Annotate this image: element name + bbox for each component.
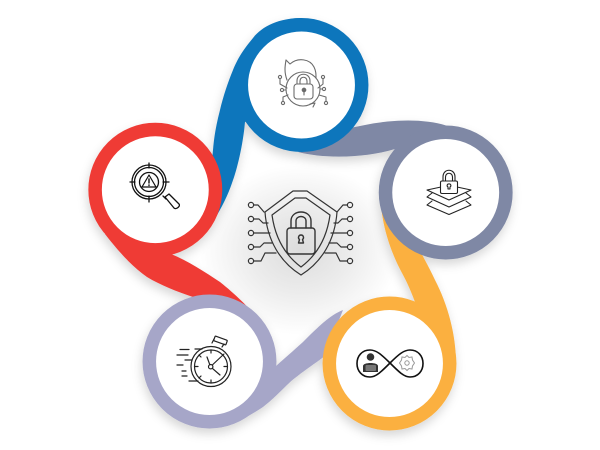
shield outline: [265, 191, 337, 275]
right circuits: [325, 202, 353, 264]
icon: stopwatch with speed lines: [177, 336, 231, 386]
ribbons and rings: [95, 18, 506, 428]
ring: orange: [329, 303, 450, 424]
ring: red: [95, 130, 216, 250]
ring: blue: [241, 25, 362, 145]
gear: [400, 356, 414, 370]
left circuits: [248, 202, 276, 264]
shield inner: [272, 198, 330, 267]
tail: slate: [298, 121, 446, 192]
hacker figure: [363, 353, 378, 372]
icon: infinity loop with hacker and gear: [357, 350, 423, 377]
tail: lavender: [209, 310, 343, 428]
tail: blue: [206, 18, 301, 222]
padlock: [287, 212, 315, 254]
tail: red: [105, 189, 258, 320]
icon: locked stacked layers: [427, 170, 471, 214]
ring: slate: [386, 132, 506, 253]
infinity: [357, 350, 423, 377]
icon: center shield with padlock and circuits: [248, 191, 353, 275]
center glow: [200, 165, 400, 335]
tail: orange: [381, 206, 456, 363]
icon: padlock with circuits and speech bubble: [278, 60, 328, 107]
ring: lavender: [149, 301, 270, 422]
icon: magnifier with warning target: [130, 163, 179, 209]
